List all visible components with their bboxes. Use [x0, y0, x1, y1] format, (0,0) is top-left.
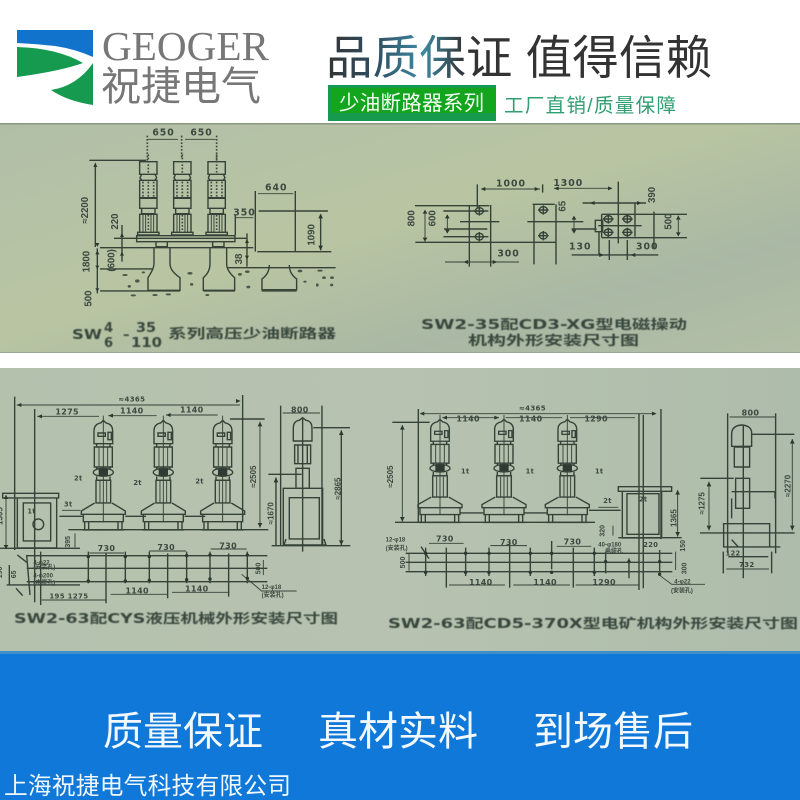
caption: CD5-370X: SW2-63配CD5-370X型电矿机构外形安装尺寸图 — [388, 616, 798, 632]
diagram: SW series breaker: 38 — [234, 253, 245, 264]
diagram: CD5-370X mounting: 320 — [599, 525, 606, 537]
diagram: CYS hydraulic mounting: 1140 — [125, 587, 149, 596]
diagram: CD5-370X mounting — [386, 404, 795, 594]
diagram: CYS hydraulic mounting — [0, 395, 350, 605]
diagram: CD5-370X mounting: 4-φ22 — [674, 580, 691, 586]
diagram: CD5-370X mounting: (安装孔) — [386, 544, 408, 552]
panel: bottom photo — [0, 368, 800, 653]
diagram: CD3-XG mounting: 500 — [663, 214, 674, 230]
diagram: CYS hydraulic mounting: ≈1670 — [266, 502, 275, 524]
diagram: SW series breaker: 1090 — [307, 224, 318, 246]
caption: SW series: 4 — [104, 321, 113, 336]
logo Chinese name: 祝捷电气 — [101, 65, 261, 109]
diagram: CYS hydraulic mounting: 2t — [195, 478, 204, 486]
diagram: CD5-370X mounting: 730 — [436, 535, 454, 544]
diagram: CYS hydraulic mounting: (安装孔) — [33, 563, 55, 571]
diagram: CD5-370X mounting: 220 — [643, 541, 658, 549]
diagram: CD5-370X mounting: 150 — [680, 540, 687, 552]
caption: SW series: – — [123, 328, 130, 343]
diagram: SW series breaker: 350 — [233, 207, 256, 218]
footer band — [0, 651, 800, 800]
diagram: SW series breaker: 1800 — [81, 251, 92, 272]
diagram: SW series breaker: 650 — [152, 127, 175, 138]
caption: CYS: SW2-63配CYS液压机械外形安装尺寸图 — [14, 611, 338, 627]
diagram: CYS hydraulic mounting: 3t — [64, 500, 73, 508]
diagram: CD5-370X mounting: 1140 — [533, 578, 557, 587]
diagram: SW series breaker: ≈2200 — [80, 197, 91, 224]
diagram: CD5-370X mounting: 1140 — [456, 415, 480, 424]
caption: CD3-XG: SW2-35配CD3-XG型电磁操动 — [421, 317, 687, 333]
diagram: CD5-370X mounting: ≈2505 — [386, 465, 395, 488]
diagram: CYS hydraulic mounting: ≈4365 — [118, 396, 145, 404]
diagram: CYS hydraulic mounting: 12-φ18 — [262, 585, 282, 591]
diagram: CD5-370X mounting: 300 — [682, 563, 689, 574]
diagram: CYS hydraulic mounting: ≈2505 — [249, 465, 258, 488]
diagram: CYS hydraulic mounting: (电缆孔) — [33, 578, 55, 586]
company name: 上海祝捷电气科技有限公司 — [4, 773, 291, 800]
diagram: CYS hydraulic mounting: 730 — [157, 543, 175, 552]
caption: SW series: 系列高压少油断路器 — [168, 323, 336, 342]
diagram: CD5-370X mounting: 1290 — [584, 415, 608, 424]
diagram: CD5-370X mounting: 1140 — [519, 415, 543, 424]
diagram: CYS hydraulic mounting: 730 — [98, 544, 115, 553]
caption: SW series: 6 — [104, 336, 113, 351]
title: 品质保证 值得信赖 — [326, 32, 712, 84]
diagram: CD3-XG mounting: 1000 — [496, 179, 526, 190]
diagram: CD3-XG mounting: 300 — [636, 241, 658, 252]
caption: SW series — [72, 321, 336, 351]
diagram: CD3-XG mounting — [407, 178, 687, 267]
promise: quality: 质量保证 — [103, 710, 263, 754]
panel: top photo — [0, 123, 800, 353]
promise: materials: 真材实料 — [318, 710, 478, 754]
diagram: CYS hydraulic mounting: 1140 — [180, 405, 204, 414]
diagram: CYS hydraulic mounting: 730 — [219, 541, 237, 550]
diagram: CD5-370X mounting: 2t — [639, 496, 648, 504]
diagram: CD5-370X mounting: 730 — [500, 538, 518, 547]
diagram: CYS hydraulic mounting: 800 — [291, 405, 309, 414]
diagram: CYS hydraulic mounting: 65 — [11, 570, 18, 578]
diagram: CYS hydraulic mounting: 500 — [256, 563, 263, 574]
series badge: 少油断路器系列 — [339, 92, 484, 115]
diagram: CD5-370X mounting: 730 — [564, 537, 581, 546]
diagram: CD3-XG mounting: 130 — [569, 241, 591, 252]
diagram: CD5-370X mounting: (安装孔) — [671, 586, 693, 594]
diagram: CD5-370X mounting: 800 — [742, 409, 759, 418]
diagram: SW series breaker — [80, 127, 336, 307]
diagram: CD3-XG mounting: 600 — [428, 210, 439, 226]
diagram: CD5-370X mounting: 1t — [526, 468, 535, 476]
diagram: CD5-370X mounting: 1290 — [592, 578, 616, 587]
diagram: CD5-370X mounting: 122 — [726, 550, 741, 558]
diagram: CYS hydraulic mounting: (安装孔) — [262, 591, 284, 599]
diagram: CD5-370X mounting: 1365 — [670, 509, 679, 527]
header: logo — [17, 23, 270, 109]
diagram: CD5-370X mounting: ≈2270 — [783, 474, 792, 497]
caption: SW series: SW — [72, 328, 102, 343]
diagram: CD5-370X mounting: 500 — [400, 557, 407, 568]
diagram: SW series breaker: 650 — [190, 127, 213, 138]
diagram: CYS hydraulic mounting: 195 1275 — [49, 592, 88, 600]
diagram: CD5-370X mounting: 12-φ18 — [386, 538, 406, 544]
diagram: CD3-XG mounting: 65 — [558, 200, 569, 212]
diagram: CYS hydraulic mounting: 2t — [74, 474, 83, 482]
diagram: CD5-370X mounting: ≈1275 — [697, 492, 706, 514]
diagram: CYS hydraulic mounting: 2t — [133, 479, 142, 487]
diagram: CD3-XG mounting: 390 — [647, 187, 658, 203]
diagram: CYS hydraulic mounting: 1140 — [120, 406, 144, 415]
diagram: SW series breaker: (600) — [107, 249, 118, 272]
diagram: CD5-370X mounting: 732 — [739, 561, 755, 569]
diagram: CD5-370X mounting: 1t — [461, 468, 470, 476]
diagram: CYS hydraulic mounting: 4-φ22 — [33, 560, 50, 566]
diagram: CD5-370X mounting: 1140 — [469, 578, 493, 587]
diagram: CD3-XG mounting: 800 — [407, 210, 418, 226]
diagram: CD5-370X mounting: 电缆孔 — [605, 547, 623, 555]
caption: SW series: 35 — [136, 321, 156, 336]
diagram: CD5-370X mounting: 1t — [595, 468, 604, 476]
diagram: CD5-370X mounting: 40-φ180 — [598, 542, 622, 548]
diagram: CYS hydraulic mounting: 1t — [27, 508, 36, 516]
diagram: CYS hydraulic mounting: ≈2865 — [333, 477, 342, 500]
series badge — [328, 85, 496, 121]
diagram: CD5-370X mounting: ≈4365 — [519, 404, 546, 412]
promise: after-sales: 到场售后 — [533, 710, 693, 754]
diagram: CYS hydraulic mounting: 4-φ200 — [33, 574, 54, 580]
icon: logo mark — [17, 30, 93, 105]
diagram: CYS hydraulic mounting: 395 — [65, 536, 72, 548]
diagram: CYS hydraulic mounting: 1275 — [55, 407, 79, 416]
diagram: CD5-370X mounting: 2t — [603, 497, 612, 505]
caption: CD3-XG — [421, 317, 687, 349]
logo wordmark: GEOGER — [102, 23, 270, 69]
diagram: CD3-XG mounting: 1300 — [553, 178, 583, 189]
diagram: CD3-XG mounting: 300 — [497, 248, 520, 259]
diagram: SW series breaker: 220 — [110, 214, 121, 230]
caption: SW series: 110 — [131, 336, 162, 351]
diagram: SW series breaker: 500 — [83, 291, 94, 307]
subtitle: 工厂直销/质量保障 — [504, 95, 676, 117]
diagram: CYS hydraulic mounting: 1140 — [185, 585, 209, 594]
caption: CD3-XG: 机构外形安装尺寸图 — [468, 330, 639, 349]
diagram: SW series breaker: 640 — [265, 183, 287, 194]
